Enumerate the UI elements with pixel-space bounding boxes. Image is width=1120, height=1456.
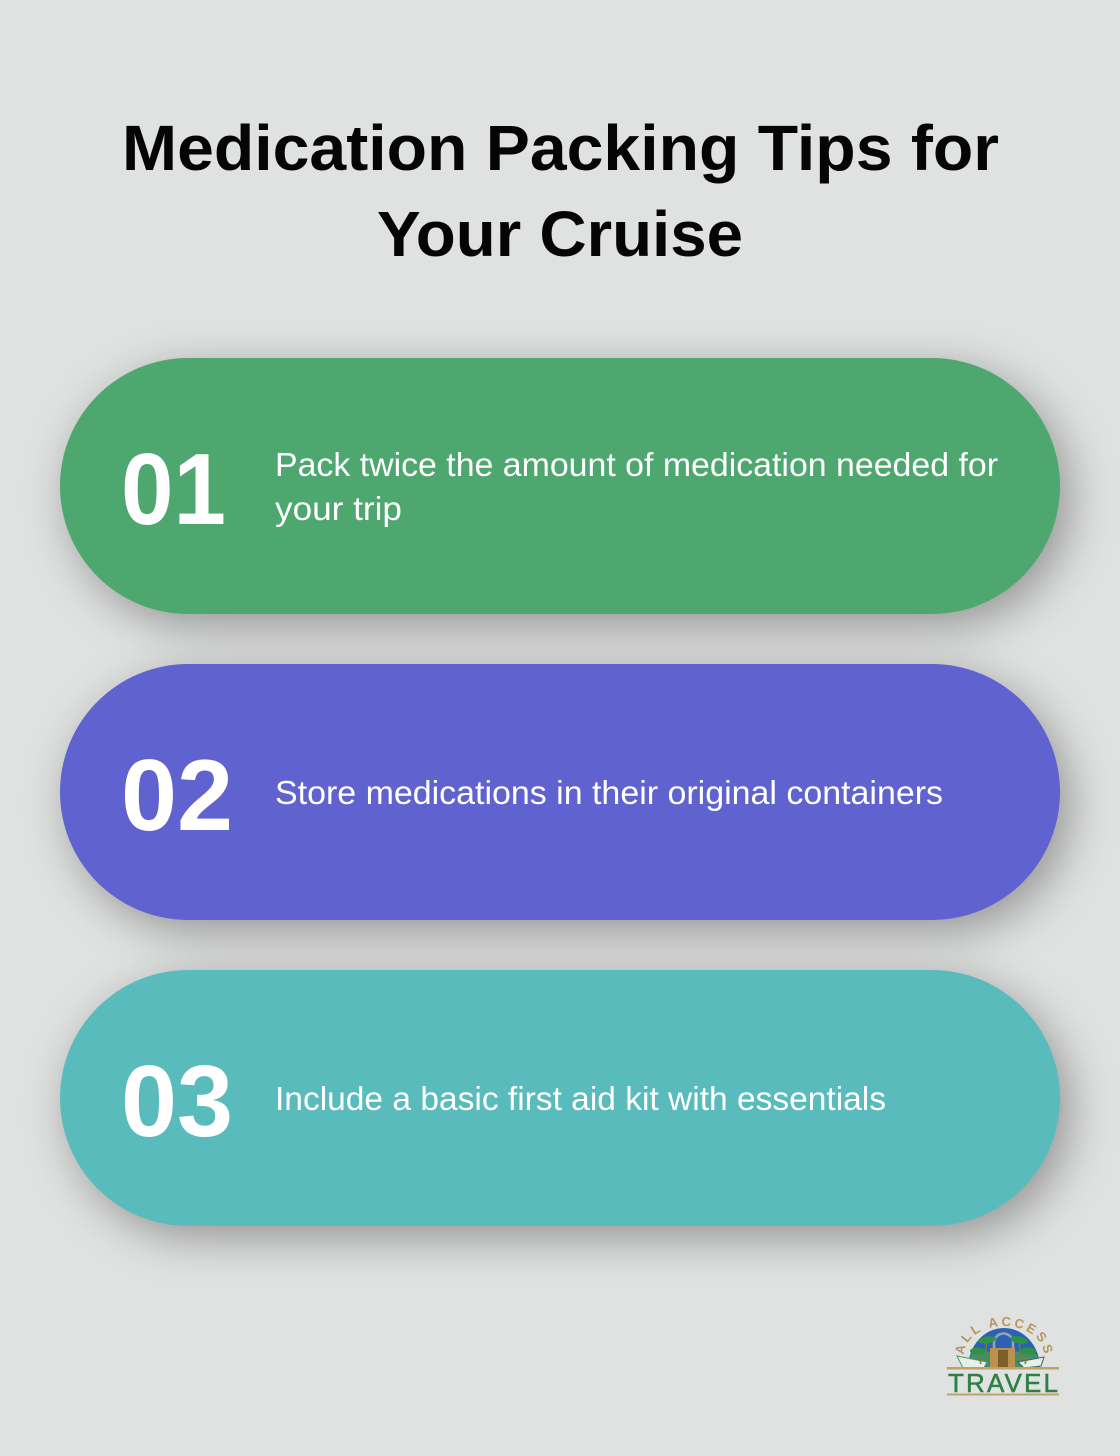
- tip 02 content: [121, 740, 943, 852]
- tip 03 content: 03: [121, 1046, 233, 1158]
- tip 01 content: Pack twice the amount of medication needed for: [275, 446, 998, 483]
- logo: All Access Travel: TRAVEL: [948, 1368, 1058, 1398]
- logo: All Access Travel: ALL ACCESS: [956, 1317, 1052, 1354]
- title: [122, 112, 999, 270]
- tip 01 content: 01: [121, 434, 226, 546]
- panel: tip 02 background: [60, 664, 1060, 920]
- panel: tip 01 background: [60, 358, 1060, 614]
- tip 03 content: [121, 1046, 886, 1158]
- tip 01 content: [121, 434, 998, 546]
- title: Your Cruise: [377, 198, 743, 270]
- logo: All Access Travel: [947, 1317, 1059, 1398]
- tip 03 content: Include a basic first aid kit with essentials: [275, 1080, 886, 1117]
- tip 02 content: Store medications in their original containers: [275, 774, 943, 811]
- tip 02 content: 02: [121, 740, 233, 852]
- panel: tip 03 background: [60, 970, 1060, 1226]
- title: Medication Packing Tips for: [122, 112, 999, 184]
- tip 01 content: your trip: [275, 490, 402, 527]
